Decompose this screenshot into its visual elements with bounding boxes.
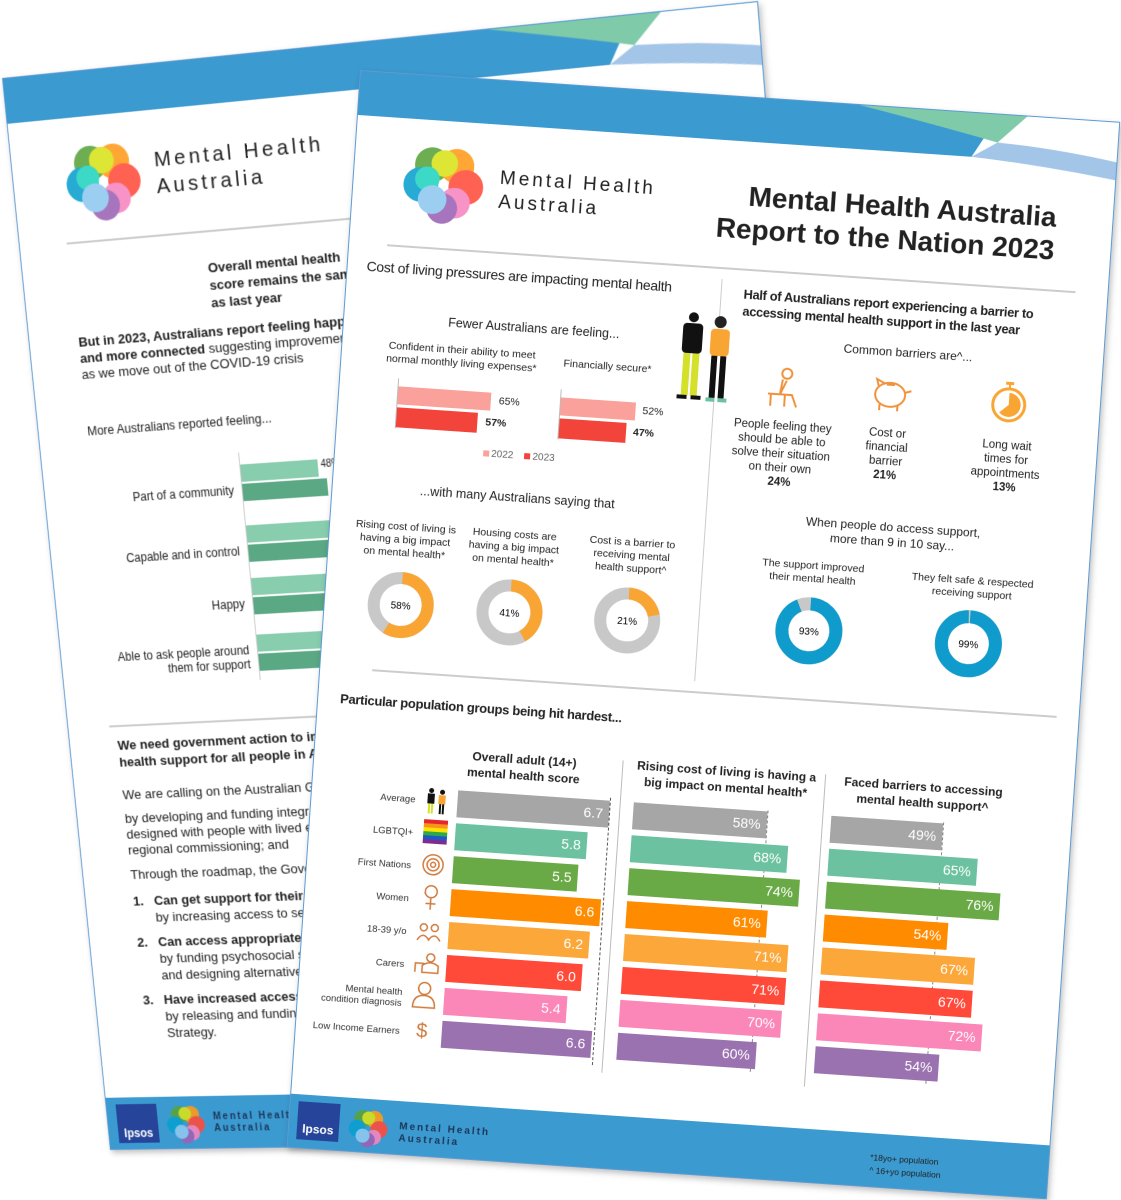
back logo <box>66 143 142 221</box>
back text: government action: health support for all people in Australia <box>119 744 365 770</box>
back header band <box>2 12 762 124</box>
column header 1 <box>467 749 580 787</box>
panel: population charts: 18-39 y/o <box>367 923 407 937</box>
bar chart col 3: 67% <box>937 993 966 1011</box>
panel: population charts: Mental health <box>345 983 403 998</box>
bar chart col 2: 68% <box>753 849 782 866</box>
donut: housing: Housing costs are <box>472 526 557 543</box>
bar chart col 2: 71% <box>753 948 782 966</box>
back text: government action: and designing alternatives <box>161 964 310 982</box>
panel: population charts: Low Income Earners <box>312 1020 400 1037</box>
donut: housing: having a big impact <box>468 539 559 557</box>
back text: government action: Strategy. <box>166 1024 217 1040</box>
text: cost barrier: 21% <box>873 469 897 482</box>
bar chart col 3: 65% <box>942 862 971 879</box>
logo text: Australia <box>498 192 600 220</box>
icon: stopwatch <box>991 382 1026 423</box>
donut: improved <box>762 557 865 665</box>
icon: MHA logo <box>348 1110 388 1148</box>
donut: improved: 93% <box>798 626 819 639</box>
back headline: score: Overall mental health <box>207 249 341 276</box>
heading <box>742 287 1034 337</box>
text: solve own: on their own <box>748 460 812 477</box>
back chart: more Australians reported feeling: Part of a community <box>132 483 235 504</box>
back text: government action: by releasing and funding the Workforce <box>165 1003 388 1024</box>
donut: housing: on mental health* <box>472 552 554 569</box>
bar chart col 2: 74% <box>765 882 794 900</box>
bar chart: confident: 65% <box>498 395 520 409</box>
heading: Cost of living pressures are impacting mental health <box>366 258 672 295</box>
donut: rising cost <box>356 518 456 638</box>
logo text <box>498 168 657 220</box>
subheading: access support: When people do access support, <box>805 514 981 540</box>
text: wait times: appointments <box>970 465 1040 482</box>
bar chart col 3: 72% <box>947 1027 976 1045</box>
bar chart col 2: 71% <box>751 981 780 999</box>
back text: improvements: as we move out of the COVID-19 crisis <box>81 350 304 382</box>
bar chart col 2: 70% <box>747 1014 776 1031</box>
back headline: score <box>207 249 360 311</box>
footer text: Australia <box>398 1133 459 1148</box>
donut: cost barrier: health support^ <box>595 560 667 577</box>
donut: cost barrier: Cost is a barrier to <box>589 534 676 552</box>
row labels: Average <box>380 792 416 805</box>
text: wait times: times for <box>984 452 1028 467</box>
panel: barriers <box>731 287 1040 678</box>
donut: safe: 99% <box>958 639 979 651</box>
back footer: Mental Health <box>213 1110 299 1122</box>
bar chart: confident: normal monthly living expenses* <box>386 352 537 375</box>
heading: Half of Australians report experiencing a barrier to <box>743 287 1034 321</box>
row icons: $ <box>415 1020 428 1043</box>
title <box>715 181 1058 266</box>
back text: government action: by funding psychosocial supports <box>159 946 348 966</box>
donut: cost barrier: 21% <box>617 616 638 628</box>
back text: government action: by developing and funding integrated services <box>124 800 386 826</box>
text: solve own: should be able to <box>738 432 826 450</box>
bar chart col 1: 6.7 <box>583 804 604 821</box>
footnotes: *18yo+ population <box>870 1152 939 1167</box>
bar chart col 2 <box>616 802 800 1070</box>
column header 1: mental health score <box>467 765 580 787</box>
text: solve own: 24% <box>767 476 791 489</box>
front page <box>287 70 1120 1199</box>
bar chart col 3: 76% <box>965 896 994 914</box>
back text: government action: We need government action to improve access to mental <box>117 722 468 753</box>
back footer: Australia <box>214 1122 272 1134</box>
bar chart col 2: 58% <box>732 814 761 832</box>
icon: Ipsos logo <box>296 1101 341 1142</box>
panel: cost of living <box>356 258 676 654</box>
text: cost barrier: Cost or <box>869 426 906 441</box>
back chart: more Australians reported feeling: 48% <box>320 458 341 470</box>
panel: population charts: Carers <box>375 957 405 970</box>
back headline: score: as last year <box>210 289 283 311</box>
bar chart col 1: 6.0 <box>556 967 576 985</box>
back text: government action <box>117 722 501 1040</box>
back text: government action: 3. Have increased access to workforce <box>142 986 384 1007</box>
footer band <box>287 1094 1051 1200</box>
back text: government action: 1. Can get support for their mental health <box>132 885 391 909</box>
bar chart col 1: 6.2 <box>563 935 584 952</box>
donut: cost barrier <box>589 534 676 654</box>
back text: government action: designed with people with lived experience, through <box>126 815 421 842</box>
legend: 2022 2023 <box>491 449 555 464</box>
icon: piggy bank <box>874 376 912 412</box>
subheading: Common barriers are^... <box>843 342 973 364</box>
text: cost barrier: financial <box>865 440 908 455</box>
column header 2 <box>637 758 817 800</box>
panel: population charts: condition diagnosis <box>321 993 402 1009</box>
bar chart col 1 <box>440 790 610 1058</box>
bar chart col 2: 60% <box>721 1045 750 1063</box>
back chart: more Australians reported feeling: Capable and in control <box>126 544 241 565</box>
footnotes: ^ 16+yo population <box>869 1165 941 1180</box>
footnotes <box>869 1151 942 1182</box>
column header 2: Rising cost of living is having a <box>637 758 817 785</box>
footer text: Mental Health <box>399 1121 490 1138</box>
column header 1: Overall adult (14+) <box>472 749 577 770</box>
back text: government action: 2. Can access appropriate support <box>136 928 354 950</box>
panel: population charts: LGBTQI+ <box>373 825 414 838</box>
donut: improved: their mental health <box>769 570 856 588</box>
bar chart: confident: Confident in their ability to meet <box>388 340 536 362</box>
back page <box>2 1 850 1150</box>
column header 2: big impact on mental health* <box>644 775 808 800</box>
text: wait times: 13% <box>992 481 1016 495</box>
text: cost barrier: barrier <box>869 455 903 469</box>
back chart: more Australians reported feeling: Able to ask people around <box>117 643 250 664</box>
bar chart: financially secure <box>557 358 664 443</box>
subheading 2: ...with many Australians saying that <box>419 484 615 511</box>
back chart: more Australians reported feeling: Happy <box>211 597 246 613</box>
donut: safe: receiving support <box>931 585 1012 603</box>
logo text: Mental Health <box>499 168 657 199</box>
text: solve own <box>731 417 832 489</box>
back footer: Ipsos <box>124 1126 154 1140</box>
donut: rising cost: 58% <box>390 600 411 613</box>
text: wait times: Long wait <box>982 438 1032 454</box>
back text: improvements <box>78 312 362 382</box>
column header 3: Faced barriers to accessing <box>844 775 1003 799</box>
footer text <box>398 1121 490 1148</box>
donut: safe: They felt safe & respected <box>911 571 1034 591</box>
panel: population charts: Women <box>376 891 409 904</box>
text: cost barrier <box>865 426 908 482</box>
back text: improvements: But in 2023, Australians report feeling happier <box>78 312 362 350</box>
back chart: more Australians reported feeling <box>87 411 341 680</box>
icon: Ipsos logo: Ipsos <box>302 1122 334 1138</box>
logo <box>403 147 484 224</box>
bar chart: financially secure: 52% <box>642 405 664 418</box>
text: solve own: solve their situation <box>731 445 830 464</box>
text: solve own: People feeling they <box>734 417 832 436</box>
icon: people illustration <box>676 312 730 403</box>
bar chart col 3 <box>814 816 1000 1082</box>
bar chart col 3: 67% <box>940 961 969 978</box>
back logo text: Mental Health <box>153 132 325 172</box>
bar chart col 1: 6.6 <box>574 903 595 920</box>
back chart: more Australians reported feeling: More Australians reported feeling... <box>87 411 272 439</box>
bar chart col 1: 6.6 <box>565 1034 586 1052</box>
bar chart col 1: 5.5 <box>552 868 572 885</box>
back footer <box>106 1085 851 1151</box>
back logo text: Australia <box>155 165 267 198</box>
column header 3: mental health support^ <box>856 791 989 814</box>
donut: improved: The support improved <box>762 557 865 575</box>
bar chart: confident <box>386 340 537 433</box>
bar chart col 2: 61% <box>732 913 761 931</box>
icon: sitting person <box>768 368 798 408</box>
back text: government action: We are calling on the Australian Government to deliver a roadmap <box>122 771 501 802</box>
bar chart: financially secure: 47% <box>633 426 654 440</box>
bar chart col 1: 5.8 <box>561 836 581 853</box>
bar chart: confident: 57% <box>485 416 507 430</box>
subheading: Fewer Australians are feeling... <box>448 316 620 341</box>
donut: safe <box>911 571 1034 678</box>
header band <box>358 71 1116 180</box>
back logo text <box>153 132 325 198</box>
text: wait times <box>970 438 1040 495</box>
row icons <box>411 788 448 1043</box>
back text: government action: Through the roadmap, the Government can ensure people: <box>130 855 467 882</box>
title: Mental Health Australia <box>748 181 1058 233</box>
bar chart col 3: 49% <box>908 826 937 844</box>
donut: rising cost: having a big impact <box>360 531 451 549</box>
bar chart: financially secure: Financially secure* <box>563 358 652 376</box>
bar chart col 3: 54% <box>904 1057 933 1075</box>
heading: accessing mental health support in the last year <box>742 304 1020 337</box>
back text: government action: regional commissioning; and <box>127 837 290 857</box>
column header 3 <box>844 775 1003 814</box>
donut: housing: 41% <box>499 608 520 620</box>
subheading: access support: more than 9 in 10 say... <box>830 531 955 554</box>
back text: improvements: and more connected suggesting improvements <box>79 329 358 366</box>
back text: government action: by increasing access to services <box>155 904 339 925</box>
title: Report to the Nation 2023 <box>715 212 1055 266</box>
panel: population charts <box>312 749 1003 1087</box>
bar chart col 3: 54% <box>913 926 942 944</box>
donut: rising cost: Rising cost of living is <box>356 518 456 537</box>
bar chart col 1: 5.4 <box>541 1000 561 1017</box>
heading: population groups: Particular population groups being hit hardest... <box>340 691 622 725</box>
donut: rising cost: on mental health* <box>363 544 445 562</box>
back headline: score: score remains the same <box>209 265 360 293</box>
donut: cost barrier: receiving mental <box>593 547 670 564</box>
subheading: access support <box>805 514 981 554</box>
panel: population charts: First Nations <box>357 857 411 871</box>
donut: housing <box>468 526 559 646</box>
back chart: more Australians reported feeling: them for support <box>167 657 251 676</box>
